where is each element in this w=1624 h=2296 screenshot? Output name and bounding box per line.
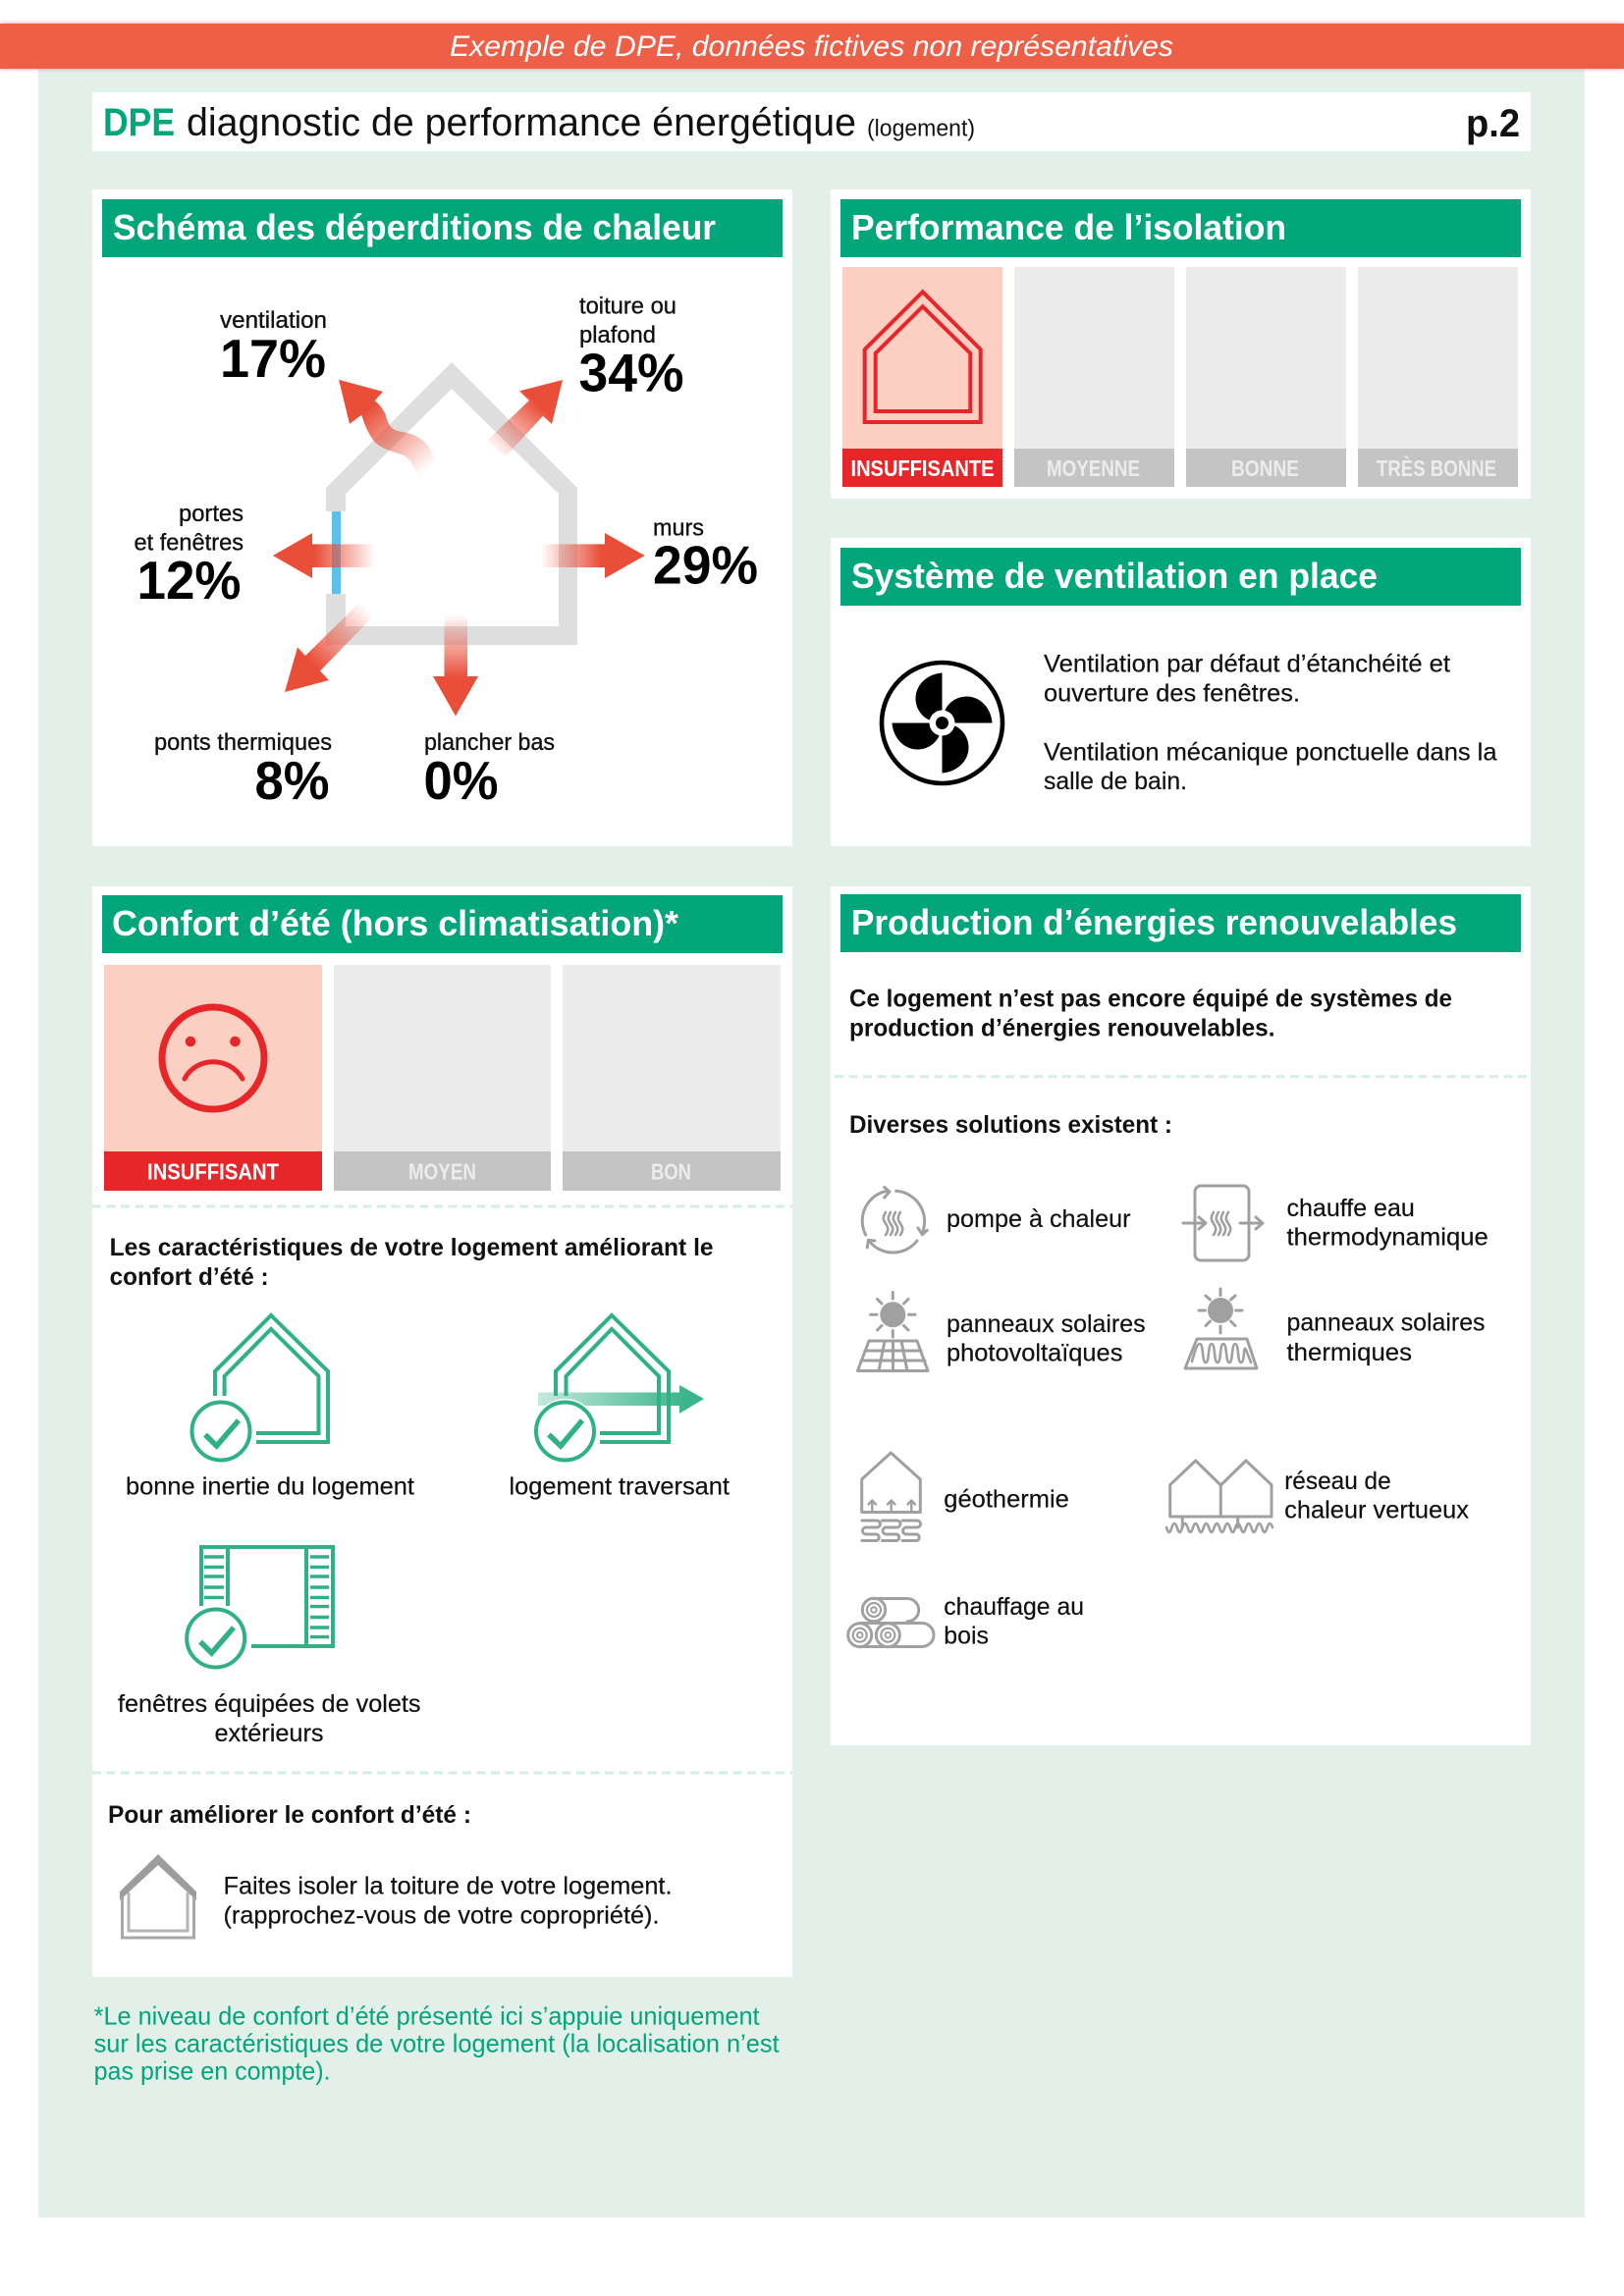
- footnote: *Le niveau de confort d’été présenté ici s’appuie uniquement: [94, 2002, 760, 2031]
- label: thermal bridges: ponts thermiques: [154, 729, 332, 756]
- arrow: ventilation: [339, 380, 435, 478]
- label: wood heating: chauffage au: [944, 1593, 1084, 1621]
- tile: insufficient comfort: [104, 965, 322, 1191]
- panel: heat loss diagram: [92, 189, 792, 846]
- panel: ventilation: [831, 538, 1531, 846]
- house outline: [326, 362, 577, 645]
- heading: renewable energy: Production d’énergies renouvelables: [851, 902, 1457, 942]
- label: wood heating: bois: [944, 1622, 989, 1649]
- label: shutters: fenêtres équipées de volets: [118, 1690, 420, 1718]
- label: roof: toiture ou: [579, 293, 677, 320]
- footnote: sur les caractéristiques de votre logement (la localisation n’est: [94, 2029, 780, 2058]
- banner text: Exemple de DPE, données fictives non représentatives: [450, 30, 1173, 63]
- icon: thermodynamic water heater: [1183, 1186, 1263, 1260]
- improvement text: [224, 1873, 672, 1930]
- label: doors and windows: 12%: [137, 550, 242, 611]
- label: photovoltaic panels: panneaux solaires: [947, 1310, 1146, 1338]
- icon: sad face: [162, 1007, 264, 1109]
- panel: renewable energy: [831, 886, 1531, 1745]
- tile: good: [1186, 267, 1346, 487]
- arrow: thermal bridges: [285, 602, 374, 692]
- heading: insulation: Performance de l’isolation: [851, 207, 1286, 247]
- label: solar thermal panels: [1286, 1309, 1485, 1366]
- icon: geothermal: [862, 1453, 921, 1541]
- label: thermal bridges: 8%: [255, 750, 330, 811]
- tile: very good: TRÈS BONNE: [1377, 454, 1496, 481]
- arrow: floor: [433, 614, 478, 717]
- comfort features heading: [110, 1234, 714, 1291]
- label: floor: [424, 729, 555, 811]
- label: wood heating: [944, 1593, 1084, 1649]
- title bar: [92, 92, 1531, 151]
- label: walls: 29%: [653, 534, 758, 595]
- no system statement: production d’énergies renouvelables.: [849, 1015, 1274, 1042]
- label: ventilation: 17%: [220, 328, 326, 389]
- label: thermal bridges: [154, 729, 332, 811]
- label: photovoltaic panels: [947, 1310, 1146, 1367]
- housing tag: (logement): [867, 116, 975, 141]
- icon: roof insulation: [120, 1854, 196, 1938]
- label: thermodynamic water heater: chauffe eau: [1286, 1195, 1415, 1222]
- no system statement: [849, 986, 1452, 1042]
- icon: good inertia: [192, 1315, 328, 1461]
- heading: heat loss: Schéma des déperditions de chaleur: [113, 207, 716, 247]
- icon: solar thermal panels: [1185, 1289, 1257, 1368]
- solutions heading: Diverses solutions existent :: [849, 1111, 1172, 1139]
- icon: heat pump: [862, 1188, 927, 1253]
- label: shutters: [118, 1690, 420, 1747]
- label: district heating: [1284, 1468, 1470, 1524]
- label: floor: plancher bas: [424, 729, 555, 756]
- improvement text: Faites isoler la toiture de votre logement.: [224, 1873, 672, 1900]
- ventilation description: ouverture des fenêtres.: [1044, 679, 1300, 707]
- label: thermodynamic water heater: thermodynamique: [1286, 1224, 1489, 1252]
- label: heat pump: pompe à chaleur: [947, 1205, 1131, 1233]
- page number: p.2: [1466, 102, 1520, 145]
- label: ventilation: ventilation: [220, 307, 327, 334]
- label: good inertia: bonne inertie du logement: [126, 1472, 414, 1500]
- ventilation description: salle de bain.: [1044, 768, 1187, 795]
- label: district heating: chaleur vertueux: [1284, 1497, 1470, 1524]
- window: [332, 511, 341, 594]
- arrow: doors and windows: [273, 533, 375, 578]
- icon: fan: [882, 663, 1002, 783]
- tile: medium: MOYENNE: [1047, 455, 1140, 481]
- tile: very good: [1358, 267, 1518, 487]
- label: solar thermal panels: panneaux solaires: [1286, 1309, 1485, 1337]
- tile: insufficient comfort: INSUFFISANT: [147, 1158, 279, 1184]
- arrow: walls: [541, 533, 645, 578]
- label: doors and windows: et fenêtres: [134, 530, 244, 557]
- label: solar thermal panels: thermiques: [1286, 1339, 1412, 1366]
- label: roof: 34%: [579, 342, 683, 402]
- heading: summer comfort: Confort d’été (hors climatisation)*: [112, 903, 678, 943]
- label: roof: [579, 293, 683, 402]
- banner: [0, 24, 1624, 69]
- ventilation description: [1044, 651, 1497, 795]
- footnote: [94, 2002, 780, 2086]
- label: district heating: réseau de: [1284, 1468, 1391, 1495]
- tile: insufficient: [842, 267, 1002, 487]
- label: floor: 0%: [424, 750, 499, 811]
- label: doors and windows: portes: [179, 501, 244, 527]
- panel: insulation: [831, 189, 1531, 499]
- comfort features heading: confort d’été :: [110, 1263, 269, 1291]
- icon: wood logs: [848, 1598, 934, 1647]
- label: roof: plafond: [579, 322, 656, 348]
- tile: insufficient: INSUFFISANTE: [850, 455, 994, 481]
- icon: shutters: [187, 1547, 333, 1667]
- comfort features heading: Les caractéristiques de votre logement améliorant le: [110, 1234, 714, 1261]
- ventilation description: Ventilation mécanique ponctuelle dans la: [1044, 738, 1497, 766]
- label: shutters: extérieurs: [214, 1720, 324, 1747]
- title: DPE: [103, 101, 175, 144]
- no system statement: Ce logement n’est pas encore équipé de systèmes de: [849, 986, 1452, 1013]
- icon: district heating: [1166, 1461, 1272, 1532]
- label: doors and windows: [134, 501, 244, 611]
- icon: through apartment: [532, 1315, 704, 1464]
- improvement heading: Pour améliorer le confort d’été :: [108, 1801, 471, 1829]
- label: thermodynamic water heater: [1286, 1195, 1489, 1252]
- improvement text: (rapprochez-vous de votre copropriété).: [224, 1902, 660, 1930]
- icon: photovoltaic panels: [858, 1292, 928, 1370]
- ventilation description: Ventilation par défaut d’étanchéité et: [1044, 651, 1450, 678]
- tile: medium comfort: [334, 965, 551, 1191]
- tile: medium: [1014, 267, 1174, 487]
- label: geothermal: géothermie: [944, 1486, 1069, 1514]
- label: photovoltaic panels: photovoltaïques: [947, 1340, 1122, 1367]
- label: through apartment: logement traversant: [509, 1472, 730, 1500]
- tile: good comfort: [563, 965, 781, 1191]
- footnote: pas prise en compte).: [94, 2056, 331, 2086]
- panel: summer comfort: [92, 886, 792, 1977]
- heading: ventilation: Système de ventilation en place: [851, 556, 1378, 596]
- tile: medium comfort: MOYEN: [408, 1158, 476, 1184]
- tile: good: BONNE: [1231, 455, 1299, 481]
- arrow: roof: [487, 380, 563, 457]
- tile: good comfort: BON: [651, 1158, 691, 1184]
- label: walls: murs: [653, 514, 704, 542]
- subtitle: diagnostic de performance énergétique: [187, 101, 856, 144]
